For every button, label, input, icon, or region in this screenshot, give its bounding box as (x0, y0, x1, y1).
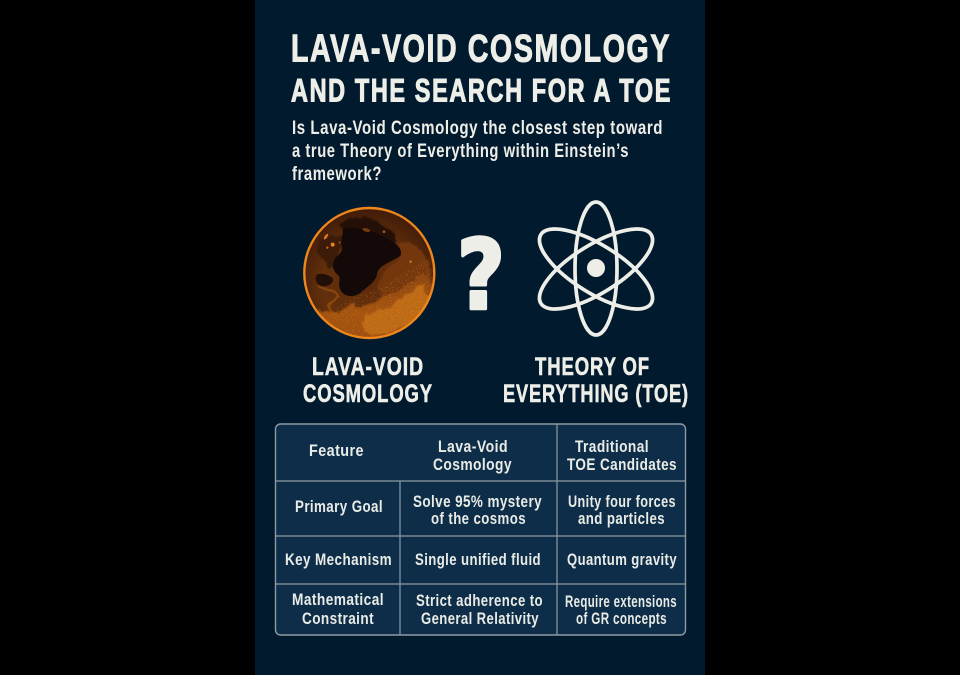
header row: Lava-Void (438, 438, 508, 456)
header row: Cosmology (433, 456, 512, 474)
subtitle question (292, 118, 663, 185)
row: key mechanism: Single unified fluid (415, 551, 541, 569)
row: primary goal: Solve 95% mystery (413, 493, 542, 511)
label: theory of everything (503, 353, 689, 408)
row: primary goal: Unity four forces (568, 493, 676, 511)
row: key mechanism: Quantum gravity (567, 551, 677, 569)
row: mathematical constraint: General Relativity (421, 610, 539, 628)
row: mathematical constraint: Require extensions (565, 593, 677, 611)
label: lava-void cosmology: COSMOLOGY (303, 380, 433, 408)
title (291, 28, 672, 108)
header row (309, 438, 677, 474)
subtitle question: framework? (292, 164, 382, 185)
row: mathematical constraint: Constraint (302, 610, 374, 628)
label: lava-void cosmology: LAVA-VOID (312, 353, 424, 381)
label: theory of everything: EVERYTHING (TOE) (503, 380, 689, 408)
row: mathematical constraint (292, 591, 677, 628)
title: AND THE SEARCH FOR A TOE (291, 72, 672, 108)
row: primary goal: Primary Goal (295, 498, 383, 516)
label: lava-void cosmology (303, 353, 433, 408)
icon: lava planet (303, 207, 438, 343)
row: key mechanism (285, 551, 677, 569)
title: LAVA-VOID COSMOLOGY (291, 28, 671, 70)
label: theory of everything: THEORY OF (535, 353, 650, 381)
header row: Feature (309, 442, 364, 460)
row: mathematical constraint: of GR concepts (576, 610, 667, 628)
row: key mechanism: Key Mechanism (285, 551, 392, 569)
header row: Traditional (575, 438, 649, 456)
row: primary goal: and particles (578, 510, 665, 528)
subtitle question: a true Theory of Everything within Einstein’s (292, 141, 629, 162)
background panel (255, 0, 705, 675)
icon: atom (528, 202, 664, 335)
comparison table (276, 424, 686, 635)
header row: TOE Candidates (567, 456, 677, 474)
row: mathematical constraint: Strict adherence to (416, 592, 543, 610)
row: mathematical constraint: Mathematical (292, 591, 384, 609)
row: primary goal: of the cosmos (431, 510, 526, 528)
row: primary goal (295, 493, 676, 528)
subtitle question: Is Lava-Void Cosmology the closest step toward (292, 118, 663, 139)
icon: question mark: ? (457, 221, 505, 332)
